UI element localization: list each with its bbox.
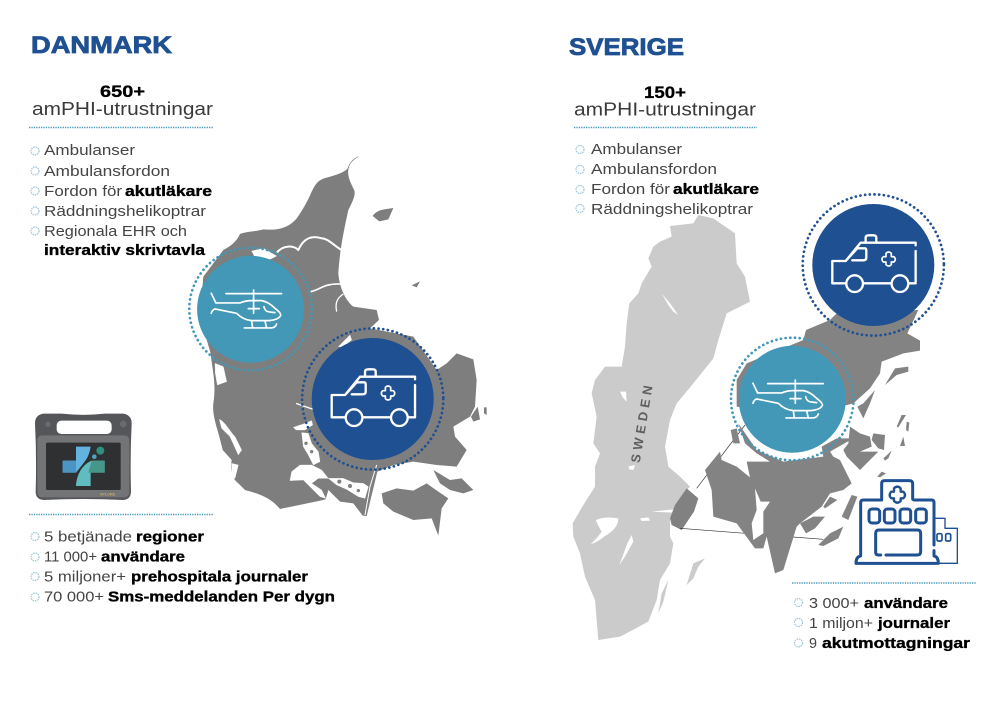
list: Sverige statistics: användare [864,595,948,612]
icon: ambulance [832,235,916,292]
list: Sverige statistics: journaler [877,615,950,632]
list: Danmark statistics: 11 000+ [44,549,97,566]
list: Danmark equipment: akutläkare [125,183,212,200]
list: Danmark equipment: interaktiv skrivtavla [44,242,206,259]
list: Sverige statistics: akutmottagningar [822,635,970,652]
icon: rugged tablet: XPLORE [100,492,116,496]
list: Danmark statistics: 5 miljoner+ [44,569,126,586]
stat: Danmark 650+ equipment: amPHI-utrustningar [32,99,213,119]
list: Danmark equipment: Fordon för [44,183,122,200]
heading: Sverige: SVERIGE [569,34,684,61]
badge: Sverige helicopter [731,338,854,460]
badge: Sverige ambulance [803,194,944,336]
list: Sverige statistics [794,595,970,652]
list: Danmark statistics: prehospitala journaler [131,569,308,586]
map: Denmark [200,156,487,536]
badge: Danmark helicopter [189,248,312,370]
list: Danmark statistics: 5 betjänade [44,529,132,546]
list: Danmark equipment: Ambulansfordon [44,163,170,180]
list: Danmark equipment: Regionala EHR och [44,223,187,240]
icon: rugged tablet [35,414,132,500]
list: Danmark equipment: Ambulanser [44,142,135,159]
list: Danmark equipment: Räddningshelikoptrar [44,203,206,220]
badge: Danmark ambulance [302,328,443,470]
list: Danmark statistics: regioner [136,529,204,546]
list: Danmark statistics: Sms-meddelanden Per dygn [108,589,335,606]
icon: helicopter [211,290,282,328]
list: Sverige statistics: 9 [809,635,817,652]
list: Danmark statistics: 70 000+ [44,589,104,606]
list: Sverige statistics: 1 miljon+ [809,615,873,632]
label: SWEDEN: SWEDEN [628,380,656,464]
stat: Sverige 150+ equipment: 150+ [644,83,686,102]
list: Sverige statistics: 3 000+ [809,595,859,612]
list: Sverige equipment: akutläkare [673,181,759,198]
heading: Danmark: DANMARK [31,32,173,59]
list: Sverige equipment: Räddningshelikoptrar [591,201,753,218]
list: Danmark statistics: användare [101,549,185,566]
icon: helicopter [753,380,823,418]
stat: Danmark 650+ equipment: 650+ [100,82,145,101]
list: Danmark statistics [31,529,335,606]
list: Danmark equipment [31,142,212,259]
map: Sweden [573,215,920,640]
list: Sverige equipment: Ambulanser [591,141,682,158]
list: Sverige equipment: Ambulansfordon [591,161,717,178]
list: Sverige equipment [576,141,759,218]
icon: hospital [856,481,957,563]
stat: Sverige 150+ equipment [574,83,756,120]
list: Sverige equipment: Fordon för [591,181,670,198]
stat: Danmark 650+ equipment [32,82,213,119]
icon: ambulance [332,369,415,426]
stat: Sverige 150+ equipment: amPHI-utrustningar [574,100,756,120]
